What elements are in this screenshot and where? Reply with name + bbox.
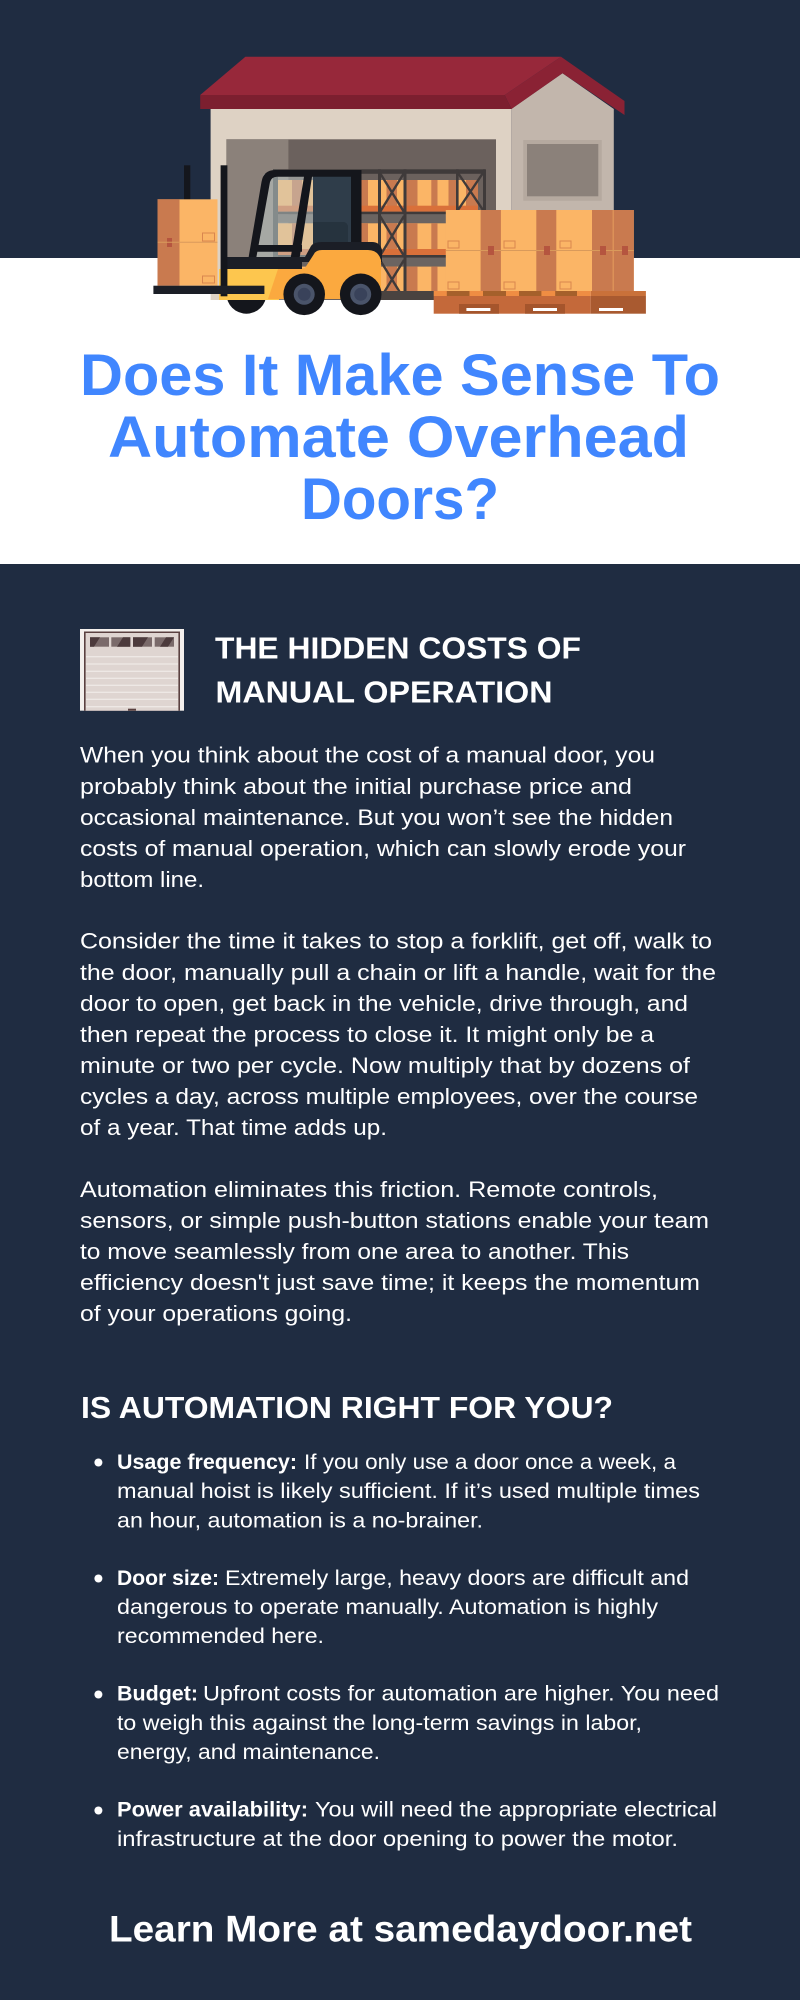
paragraph: automation eliminates friction — [80, 1177, 709, 1326]
forks — [153, 286, 264, 294]
paragraph: hidden costs intro: costs of manual operation, which can slowly erode your — [80, 836, 687, 861]
forklift cabin glass — [248, 174, 352, 262]
title — [80, 343, 720, 532]
bullet: door size: Extremely large, heavy doors are difficult and — [225, 1566, 689, 1590]
bullet: budget: Budget: — [117, 1682, 198, 1706]
heading: the hidden costs: MANUAL OPERATION — [216, 674, 552, 709]
storage rack with pallets — [273, 169, 486, 300]
bullet: door size: Door size: — [117, 1566, 219, 1590]
paragraph: automation eliminates friction: of your operations going. — [80, 1301, 352, 1326]
bullet: power availability: infrastructure at the door opening to power the motor. — [117, 1827, 678, 1851]
bullet: power availability — [94, 1798, 717, 1851]
bullet: budget: to weigh this against the long-term savings in labor, — [117, 1711, 642, 1735]
bullet: door size: dangerous to operate manually. Automation is highly — [117, 1595, 658, 1619]
bullet: door size — [94, 1566, 689, 1648]
bullet: usage frequency — [94, 1450, 700, 1532]
paragraph: hidden costs intro — [80, 743, 687, 892]
bullet: usage frequency: If you only use a door once a week, a — [304, 1450, 676, 1474]
bullet: usage frequency: Usage frequency: — [117, 1450, 297, 1474]
front wheel — [283, 274, 325, 315]
paragraph: forklift time example: Consider the time it takes to stop a forklift, get off, walk to — [80, 929, 712, 954]
forklift cabin frame — [248, 170, 362, 262]
bullet: usage frequency: manual hoist is likely sufficient. If it’s used multiple times — [117, 1479, 700, 1503]
icon: overhead garage door — [80, 629, 184, 711]
middle wheel — [340, 274, 382, 315]
illustration: warehouse with forklift and boxes — [153, 57, 646, 315]
paragraph: forklift time example: cycles a day, across multiple employees, over the course — [80, 1084, 698, 1109]
forklift — [153, 165, 382, 315]
bullet: usage frequency: an hour, automation is a no-brainer. — [117, 1508, 483, 1532]
forklift body — [219, 242, 382, 300]
paragraph: hidden costs intro: occasional maintenance. But you won’t see the hidden — [80, 805, 673, 830]
forklift seat — [313, 176, 351, 244]
paragraph: hidden costs intro: probably think about the initial purchase price and — [80, 774, 632, 799]
title: Does It Make Sense To — [80, 343, 720, 408]
heading: the hidden costs — [215, 630, 581, 709]
bullet: power availability: Power availability: — [117, 1798, 308, 1822]
stacked boxes — [446, 210, 634, 291]
heading: is automation right for you: IS AUTOMATION RIGHT FOR YOU? — [81, 1390, 613, 1425]
rear wheel — [226, 274, 266, 314]
paragraph: automation eliminates friction: sensors, or simple push-button stations enable your team — [80, 1208, 709, 1233]
forklift front mast — [221, 165, 227, 296]
bullet: budget: Upfront costs for automation are higher. You need — [203, 1682, 719, 1706]
title: Doors? — [301, 467, 499, 532]
paragraph: forklift time example — [80, 929, 716, 1140]
bullet: budget: energy, and maintenance. — [117, 1740, 380, 1764]
paragraph: automation eliminates friction: efficiency doesn't just save time; it keeps the momentum — [80, 1270, 700, 1295]
paragraph: forklift time example: the door, manually pull a chain or lift a handle, wait for the — [80, 960, 716, 985]
paragraph: automation eliminates friction: Automation eliminates this friction. Remote controls, — [80, 1177, 658, 1202]
footer call to action: Learn More at samedaydoor.net — [109, 1909, 692, 1950]
lower navy panel — [0, 564, 800, 2000]
white title band — [0, 258, 800, 564]
paragraph: hidden costs intro: bottom line. — [80, 867, 204, 892]
warehouse building — [211, 73, 614, 300]
bullet: budget — [94, 1682, 719, 1764]
top navy band — [0, 0, 800, 258]
heading: the hidden costs: THE HIDDEN COSTS OF — [215, 630, 581, 665]
paragraph: automation eliminates friction: to move seamlessly from one area to another. This — [80, 1239, 629, 1264]
paragraph: forklift time example: minute or two per cycle. Now multiply that by dozens of — [80, 1053, 691, 1078]
bullet: door size: recommended here. — [117, 1624, 324, 1648]
wooden pallet — [434, 291, 646, 314]
paragraph: forklift time example: of a year. That time adds up. — [80, 1115, 387, 1140]
title: Automate Overhead — [108, 405, 689, 470]
paragraph: forklift time example: then repeat the process to close it. It might only be a — [80, 1022, 655, 1047]
paragraph: hidden costs intro: When you think about the cost of a manual door, you — [80, 743, 655, 768]
box on forks — [158, 199, 218, 286]
bullet list — [94, 1450, 719, 1851]
warehouse roof — [200, 57, 624, 115]
paragraph: forklift time example: door to open, get back in the vehicle, drive through, and — [80, 991, 688, 1016]
forklift rear mast — [184, 165, 190, 201]
bullet: power availability: You will need the appropriate electrical — [315, 1798, 717, 1822]
